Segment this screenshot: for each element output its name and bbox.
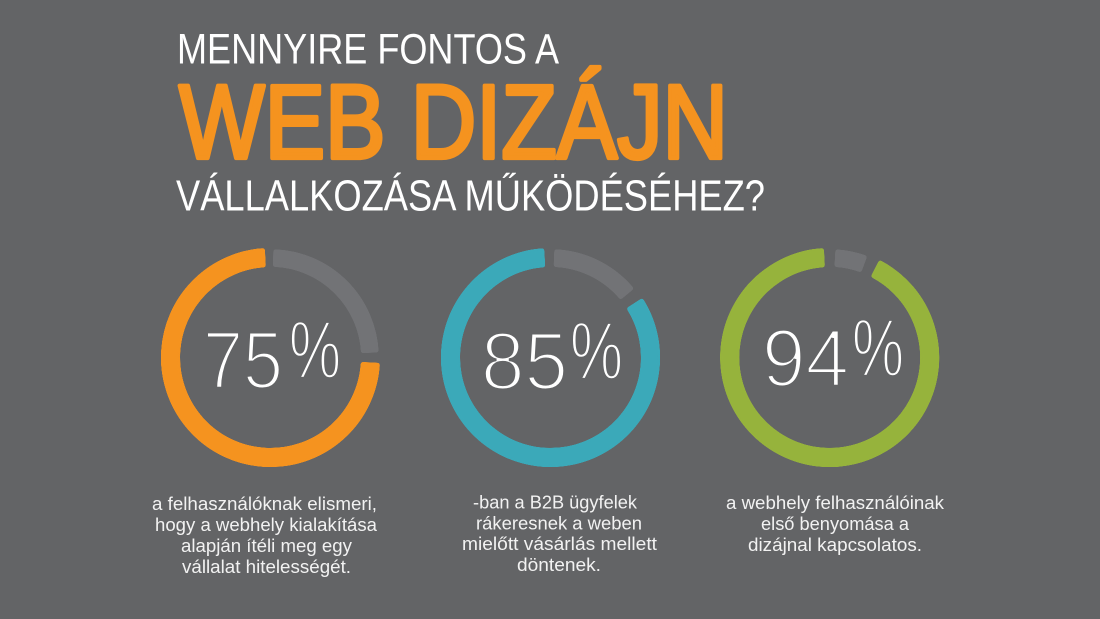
value: 94%: 94 <box>762 313 849 404</box>
caption: 94%: első benyomása a <box>761 513 910 534</box>
panel: 85% stat <box>412 219 689 575</box>
value: 94% <box>762 303 904 404</box>
caption: 85%: mielőtt vásárlás mellett <box>462 533 657 554</box>
caption: 75% <box>152 493 378 577</box>
donut chart: 85% <box>412 219 689 496</box>
caption: 85%: -ban a B2B ügyfelek <box>473 492 638 512</box>
value: 85%: % <box>570 306 623 397</box>
caption: 85% <box>462 492 657 575</box>
value: 85%: 85 <box>481 316 568 407</box>
value: 85% <box>481 306 623 407</box>
title highlight: web dizájn: WEB DIZÁJN <box>179 64 728 181</box>
panel: 75% stat <box>152 252 378 577</box>
donut chart: 75% <box>165 252 376 463</box>
value: 75%: 75 <box>203 315 283 406</box>
caption: 75%: a felhasználóknak elismeri, <box>152 493 377 514</box>
value: 94%: % <box>852 303 904 394</box>
caption: 94% <box>726 492 945 555</box>
caption: 75%: hogy a webhely kialakítása <box>155 514 378 535</box>
caption: 75%: alapján ítéli meg egy <box>181 535 353 556</box>
donut chart: 94% <box>695 223 965 492</box>
value: 75%: % <box>289 305 341 396</box>
caption: 75%: vállalat hitelességét. <box>182 556 351 577</box>
caption: 94%: a webhely felhasználóinak <box>726 492 945 513</box>
panel: 94% stat <box>695 223 965 555</box>
title <box>176 26 765 220</box>
title line 3: VÁLLALKOZÁSA MŰKÖDÉSÉHEZ? <box>176 172 765 220</box>
value: 75% <box>203 305 341 406</box>
caption: 85%: rákeresnek a weben <box>476 512 642 534</box>
caption: 94%: dizájnal kapcsolatos. <box>748 534 922 555</box>
title line 1: MENNYIRE FONTOS A <box>177 26 559 74</box>
caption: 85%: döntenek. <box>517 554 601 575</box>
